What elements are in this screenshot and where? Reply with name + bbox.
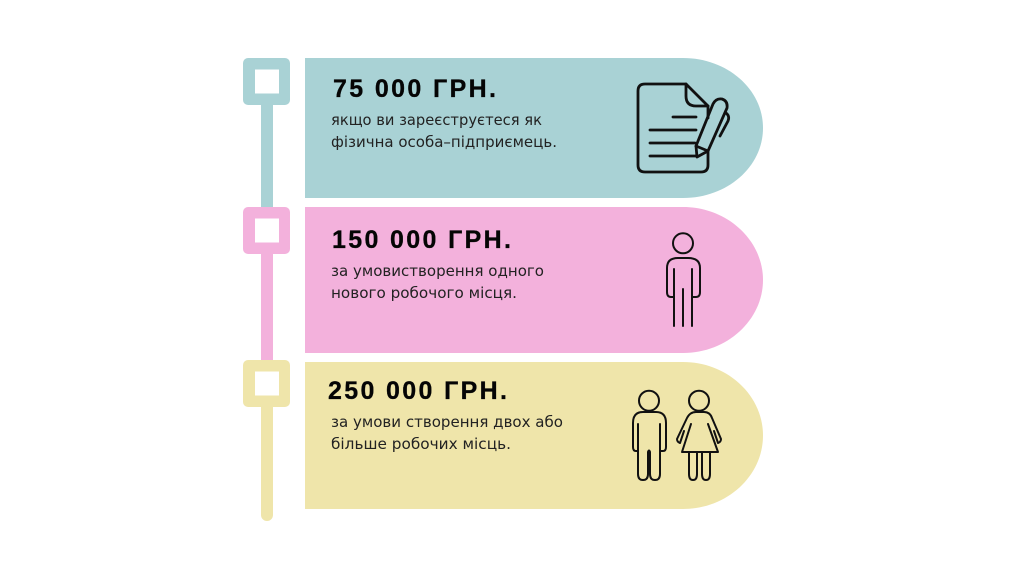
text: condition 2: нового робочого місця.: [331, 284, 517, 302]
icon: document and pen: [638, 84, 729, 172]
heading: 75 000: 75 000 ГРН.: [333, 75, 496, 103]
timeline: yellow marker: [243, 360, 290, 521]
text: condition 1: фізична особа–підприємець.: [331, 133, 557, 151]
text: condition 3: за умови створення двох або: [331, 413, 563, 431]
icon: man and woman: [633, 391, 721, 480]
timeline: teal marker: [243, 58, 290, 212]
timeline: pink marker: [243, 207, 290, 365]
icon: person: [667, 233, 700, 326]
panel: 250 000 грн: [305, 362, 763, 509]
text: condition 3: більше робочих місць.: [331, 435, 511, 453]
panel: 75 000 грн: [305, 58, 763, 198]
heading: 150 000: 150 000 ГРН.: [332, 226, 511, 254]
text: condition 1: якщо ви зареєструєтеся як: [331, 111, 542, 129]
text: condition 2: за умовистворення одного: [331, 262, 544, 280]
panel: 150 000 грн: [305, 207, 763, 353]
heading: 250 000: 250 000 ГРН.: [328, 377, 507, 405]
